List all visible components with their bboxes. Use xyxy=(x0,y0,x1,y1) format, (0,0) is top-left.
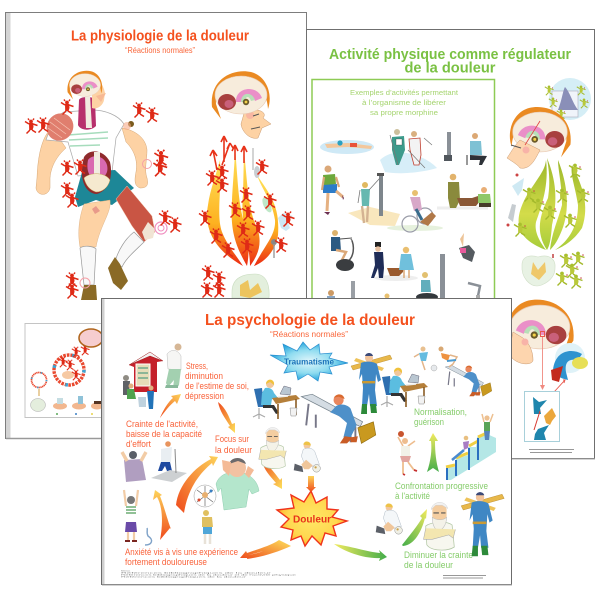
text: crainte xyxy=(126,419,202,449)
text: crainte: d'effort xyxy=(126,439,152,449)
subtitle: réactions normales: “Réactions normales” xyxy=(125,46,195,55)
panel: neurons xyxy=(524,392,560,442)
activity: dog walker xyxy=(437,174,491,208)
text: diminuer: de la douleur xyxy=(404,560,453,570)
text: intro xyxy=(350,88,459,117)
text: intro: Exemples d’activités permettant xyxy=(350,88,459,97)
illustration: pain signal flames xyxy=(207,136,293,266)
text: credits xyxy=(443,576,486,578)
text: anxiété xyxy=(125,547,238,567)
text: confrontation xyxy=(395,481,488,501)
illustration: bearded man, lower xyxy=(424,502,455,550)
activity: cycle and dog xyxy=(387,190,443,232)
devils on flames xyxy=(199,160,294,258)
illustration: crainte figures xyxy=(122,441,187,482)
illustration: kid with shoes xyxy=(294,441,320,472)
illustration: jumping woman xyxy=(398,431,417,475)
activity: swimmer xyxy=(320,140,374,154)
text: focus: la douleur xyxy=(215,445,252,455)
illustration: kiosk and family xyxy=(123,352,163,409)
text: focus xyxy=(215,434,252,455)
illustration: lower brain with synapse xyxy=(507,300,588,403)
arrow: diminuer to confrontation xyxy=(402,509,427,546)
illustration: brain and face, profile xyxy=(507,107,571,168)
text: diminuer: Diminuer la crainte xyxy=(404,550,473,560)
text: references: Références bibliographiques de la douleur et de l'activité physique xyxy=(121,574,296,576)
ring: large cell xyxy=(54,355,84,385)
ring: small cell xyxy=(32,372,46,388)
activity: runner xyxy=(322,166,344,215)
illustration: focus man covering ears xyxy=(216,458,259,510)
activity: arm exercise xyxy=(459,233,475,262)
devils around the man xyxy=(25,100,182,298)
text: references: Références bibliographiques de la douleur xyxy=(121,572,273,574)
text: stress: dépression xyxy=(185,391,224,401)
illustration: spinal cord and devils xyxy=(201,266,269,298)
arrow: down to douleur xyxy=(306,476,316,492)
subtitle: réactions normales: “Réactions normales” xyxy=(270,330,348,339)
arrow: crainte to stress xyxy=(160,394,181,418)
text: paper 2 footer xyxy=(529,450,574,452)
title: activité physique: Activité physique comme régulateur xyxy=(329,47,571,63)
text: anxiété: Anxiété vis à vis une expérience xyxy=(125,547,238,557)
illustration: thinking figure xyxy=(194,485,216,544)
text: focus: Focus sur xyxy=(215,434,249,444)
activity: couple with dog xyxy=(371,242,418,281)
text: stress: de l'estime de soi, xyxy=(185,381,249,391)
title: activité physique xyxy=(329,47,571,76)
illustration: runners and ball xyxy=(414,346,457,371)
text: anxiété: fortement douloureuse xyxy=(125,557,207,567)
illustration: conveyor man center xyxy=(301,394,376,443)
paper: Activité physique xyxy=(306,30,595,459)
text: intro: à l’organisme de libérer xyxy=(362,98,446,107)
activity: tall machine xyxy=(416,254,445,301)
illustration: stairs climbing xyxy=(446,414,496,480)
illustration: kid with shoes, lower xyxy=(376,503,402,534)
activity: skiers xyxy=(380,129,437,173)
activity: cable machine on sand xyxy=(348,173,400,226)
illustration: stooped man xyxy=(165,344,182,388)
activity: exercise bike xyxy=(331,230,354,271)
illustration: green regulating flames xyxy=(506,158,590,250)
paper: La psychologie de la douleur xyxy=(102,298,512,585)
illustration: spinal section and green devils xyxy=(522,252,584,288)
text: references: Références xyxy=(121,570,130,572)
illustration: worker with planks xyxy=(351,353,392,414)
text: normalisation: guérison xyxy=(414,417,444,427)
title: activité physique: de la douleur xyxy=(404,60,496,76)
title: physiologie: La physiologie de la douleur xyxy=(71,28,249,44)
arrow: douleur to anxiété xyxy=(240,540,291,559)
text: stress: Stress, xyxy=(186,361,208,371)
illustration: desk woman right xyxy=(381,368,428,407)
arrow: focus to crainte side xyxy=(176,456,218,513)
arrow: stress to focus xyxy=(218,402,235,433)
text: stress xyxy=(185,361,249,401)
text: stress: diminution xyxy=(185,371,223,381)
arrow: douleur to diminuer xyxy=(334,544,387,561)
text: crainte: baisse de la capacité xyxy=(126,429,202,439)
paper: La physiologie de la douleur xyxy=(6,12,306,438)
star: traumatisme: Traumatisme xyxy=(284,358,334,366)
text: crainte: Crainte de l'activité, xyxy=(126,419,198,429)
arrow: confrontation to normalisation xyxy=(427,433,439,472)
activity: lower figures xyxy=(327,281,480,305)
illustration: bubble with descending brain view xyxy=(545,78,591,120)
illustration: worker with planks, lower xyxy=(461,492,504,556)
text: diminuer xyxy=(404,550,473,570)
text: references: Références bibliographiques de la douleur xyxy=(121,576,247,578)
text: normalisation xyxy=(414,407,467,427)
arrow: trauma to douleur xyxy=(262,461,282,489)
activity: weight machine xyxy=(444,132,487,165)
illustration: woman arms up xyxy=(124,490,152,545)
arrow: anxiété to crainte xyxy=(153,490,171,540)
illustration: conveyor man right xyxy=(445,366,492,396)
illustration: man with anatomy xyxy=(36,71,167,300)
text: confrontation: à l'activité xyxy=(395,491,430,501)
text: confrontation: Confrontation progressive xyxy=(395,481,488,491)
illustration: brain and face xyxy=(212,71,271,138)
star: douleur: Douleur xyxy=(293,514,331,526)
illustration: desk woman left xyxy=(253,380,300,419)
text: intro: sa propre morphine xyxy=(370,108,438,117)
star: douleur xyxy=(277,491,347,546)
title: psychologie: La psychologie de la douleur xyxy=(205,312,415,329)
panel: endorphin cell rings xyxy=(25,324,103,418)
panel: activity examples xyxy=(312,80,494,305)
text: normalisation: Normalisation, xyxy=(414,407,467,417)
text: references xyxy=(121,570,296,578)
star: traumatisme xyxy=(270,342,348,381)
illustration: old bearded man xyxy=(259,428,286,469)
